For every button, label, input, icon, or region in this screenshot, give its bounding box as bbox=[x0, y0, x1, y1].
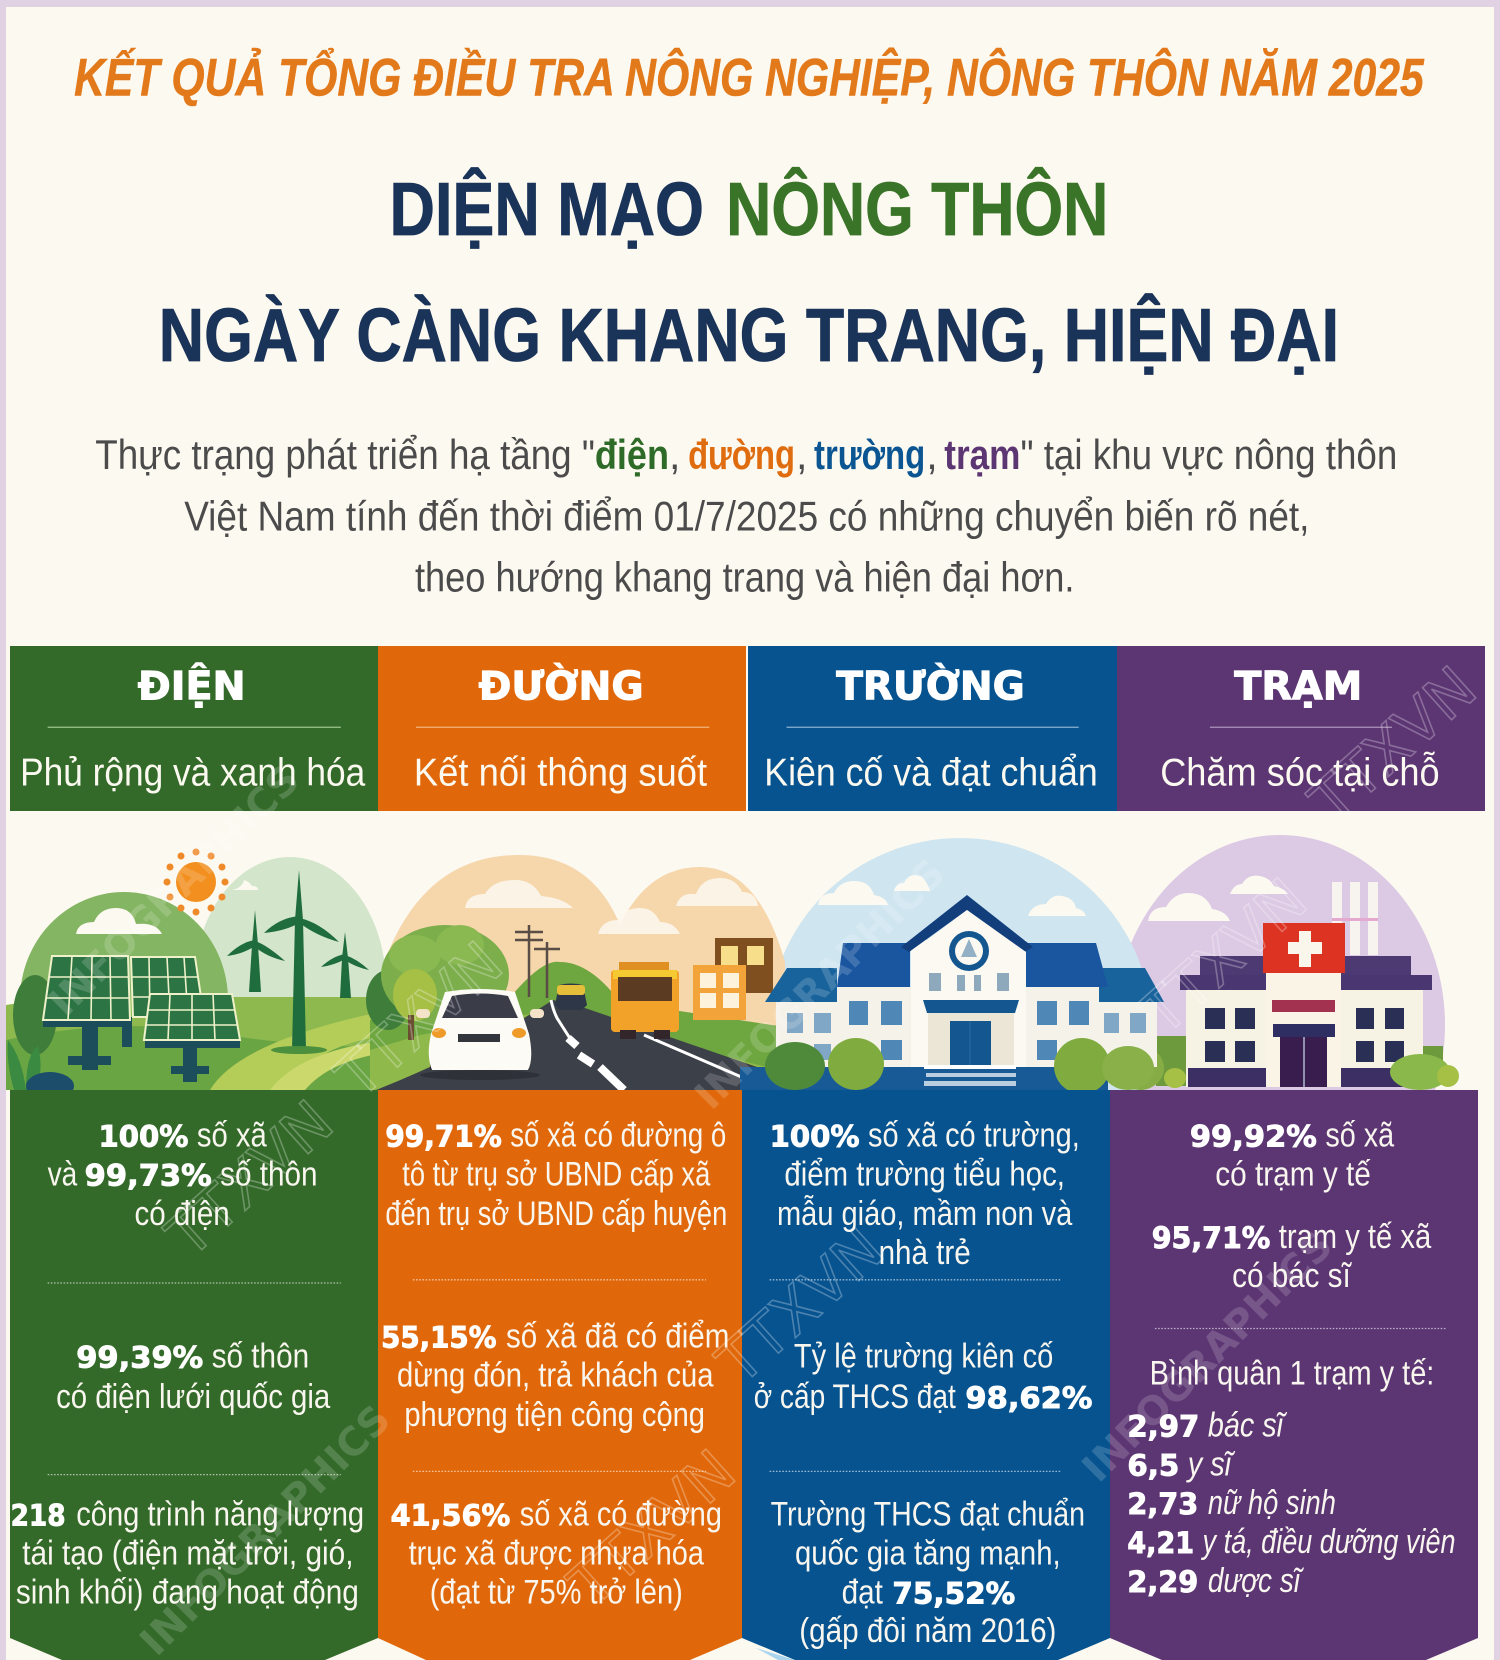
text block: trạm statistics: có trạm y tế bbox=[1215, 1156, 1371, 1194]
text block: điện statistics: và bbox=[48, 1156, 77, 1194]
icon: sun bbox=[164, 848, 228, 916]
watermark: agency marks: INFOGRAPHICS bbox=[132, 1397, 400, 1660]
icon: wind turbines bbox=[227, 870, 369, 1054]
text block: điện statistics: số thôn bbox=[212, 1338, 309, 1376]
text block: điện statistics: có điện lưới quốc gia bbox=[56, 1378, 330, 1416]
text block: introduction: theo hướng khang trang và hiện đại hơn. bbox=[415, 555, 1074, 601]
text block: trường statistics: số xã có trường, bbox=[868, 1116, 1080, 1154]
text block: introduction: Việt Nam tính đến thời điểm 01/7/2025 có những chuyển biến rõ nét, bbox=[184, 493, 1309, 539]
text block: trường statistics: điểm trường tiểu học, bbox=[784, 1156, 1065, 1194]
heading: trường: TRƯỜNG bbox=[836, 663, 1025, 710]
text block: trường statistics: 100% bbox=[770, 1118, 860, 1153]
icon: cloud bbox=[76, 908, 162, 934]
illustration: health station scene bbox=[1116, 876, 1459, 1090]
text block: điện statistics: số xã bbox=[197, 1116, 267, 1154]
heading: trạm: TRẠM bbox=[1234, 665, 1362, 710]
text block: điện statistics: số thôn bbox=[220, 1156, 318, 1194]
watermark: agency marks: TTXVN bbox=[153, 1087, 346, 1271]
text block: trạm statistics: 95,71% bbox=[1152, 1220, 1270, 1255]
icon: chimneys bbox=[1332, 882, 1378, 955]
heading: điện: ĐIỆN bbox=[138, 663, 246, 710]
title: main heading bbox=[159, 166, 1339, 377]
heading: trường bbox=[764, 663, 1098, 794]
text block: trường statistics bbox=[754, 1116, 1092, 1650]
illustration: rural road scene bbox=[366, 855, 785, 1090]
text block: introduction bbox=[95, 432, 1397, 601]
icon: houses bbox=[693, 938, 773, 1020]
text block: đường statistics: đến trụ sở UBND cấp huyện bbox=[385, 1195, 727, 1233]
text block: trạm statistics: số xã bbox=[1325, 1116, 1394, 1154]
text block: điện statistics: có điện bbox=[134, 1195, 230, 1233]
icon: health station building bbox=[1180, 923, 1432, 1087]
text block: introduction: , bbox=[796, 432, 808, 478]
text block: trạm statistics: bác sĩ bbox=[1208, 1406, 1288, 1444]
text block: đường statistics: số xã có đường ô bbox=[510, 1116, 726, 1154]
text block: điện statistics: 100% bbox=[98, 1118, 188, 1153]
text block: introduction: Thực trạng phát triển hạ tầng " bbox=[95, 432, 595, 478]
illustration: solar and wind energy scene bbox=[6, 848, 391, 1113]
icon: white car bbox=[416, 989, 544, 1080]
heading: trạm bbox=[1160, 665, 1440, 794]
text block: trường statistics: 98,62% bbox=[965, 1380, 1092, 1415]
icon: school bushes bbox=[765, 1038, 1154, 1094]
title: main heading: NÔNG THÔN bbox=[726, 167, 1108, 251]
icon: utility poles bbox=[515, 925, 560, 998]
panel: điện header bbox=[10, 646, 378, 811]
text block: đường statistics: số xã đã có điểm bbox=[506, 1318, 729, 1356]
text block: đường statistics: (đạt từ 75% trở lên) bbox=[430, 1574, 683, 1612]
text block: introduction: , bbox=[926, 432, 938, 478]
text block: đường statistics: 41,56% bbox=[391, 1497, 510, 1532]
heading: điện: Phủ rộng và xanh hóa bbox=[20, 751, 365, 794]
text block: đường statistics: dừng đón, trả khách của bbox=[397, 1357, 714, 1395]
icon: school building bbox=[765, 895, 1164, 1086]
text block: trạm statistics: nữ hộ sinh bbox=[1208, 1484, 1336, 1522]
text block: trạm statistics: có bác sĩ bbox=[1232, 1257, 1352, 1295]
text block: introduction: " tại khu vực nông thôn bbox=[1020, 432, 1397, 478]
text block: điện statistics: 99,73% bbox=[85, 1158, 212, 1193]
text block: trạm statistics: Bình quân 1 trạm y tế: bbox=[1150, 1355, 1434, 1393]
text block: đường statistics: 55,15% bbox=[381, 1320, 496, 1355]
text block: trạm statistics: 4,21 bbox=[1127, 1525, 1194, 1560]
watermark: agency marks: TTXVN bbox=[1127, 865, 1320, 1048]
heading: điện bbox=[20, 663, 365, 794]
text block: trường statistics: quốc gia tăng mạnh, bbox=[795, 1535, 1061, 1573]
text block: trạm statistics: y sĩ bbox=[1186, 1446, 1236, 1484]
text block: đường statistics: số xã có đường bbox=[520, 1495, 722, 1533]
text block: trạm statistics: trạm y tế xã bbox=[1279, 1218, 1431, 1256]
text block: introduction: trạm bbox=[944, 432, 1020, 478]
road bbox=[376, 1000, 760, 1090]
text block: trạm statistics: 2,73 bbox=[1127, 1486, 1198, 1521]
watermark: agency marks: TTXVN bbox=[322, 928, 516, 1112]
text block: introduction: điện bbox=[595, 432, 669, 478]
text block: trạm statistics: dược sĩ bbox=[1208, 1562, 1304, 1600]
text block: điện statistics: tái tạo (điện mặt trời, gió, bbox=[22, 1535, 354, 1573]
heading: trường: Kiên cố và đạt chuẩn bbox=[764, 751, 1098, 794]
text block: trường statistics: (gấp đôi năm 2016) bbox=[799, 1612, 1056, 1650]
text block: đường statistics: trục xã được nhựa hóa bbox=[409, 1535, 704, 1573]
text block: trạm statistics: 2,97 bbox=[1127, 1408, 1199, 1443]
heading: đường: ĐƯỜNG bbox=[478, 663, 644, 710]
watermark: agency marks: INFOGRAPHICS bbox=[41, 758, 309, 1025]
text block: đường statistics bbox=[381, 1116, 729, 1612]
panel: điện statistics background bbox=[10, 1090, 378, 1660]
icon: solar panels bbox=[43, 956, 240, 1082]
text block: trạm statistics: 99,92% bbox=[1190, 1118, 1317, 1153]
text block: đường statistics: tô từ trụ sở UBND cấp xã bbox=[402, 1156, 710, 1194]
heading: đường bbox=[414, 663, 709, 794]
watermark: agency marks: TTXVN bbox=[1296, 653, 1489, 837]
text block: trạm statistics bbox=[1127, 1116, 1456, 1600]
icon: health station bushes bbox=[1116, 1036, 1459, 1090]
watermark: agency marks: TTXVN bbox=[555, 1436, 748, 1620]
text block: đường statistics: phương tiện công cộng bbox=[404, 1396, 705, 1434]
text block: điện statistics: 99,39% bbox=[76, 1340, 203, 1375]
text block: trường statistics: nhà trẻ bbox=[879, 1234, 971, 1272]
text block: đường statistics: 99,71% bbox=[385, 1118, 502, 1153]
text block: trạm statistics: 2,29 bbox=[1127, 1564, 1198, 1599]
heading: trạm: Chăm sóc tại chỗ bbox=[1160, 751, 1440, 794]
panel: đường header bbox=[378, 646, 746, 811]
icon: small yellow car bbox=[555, 984, 587, 1010]
text block: introduction: trường bbox=[814, 432, 925, 478]
text block: trường statistics: mẫu giáo, mầm non và bbox=[777, 1195, 1072, 1233]
heading: đường: Kết nối thông suốt bbox=[414, 751, 707, 794]
panel: trạm header bbox=[1117, 646, 1485, 811]
icon: trees bbox=[366, 925, 509, 1040]
text block: điện statistics: sinh khối) đang hoạt động bbox=[16, 1574, 359, 1612]
text block: introduction: , bbox=[669, 432, 680, 478]
panel: đường statistics background bbox=[378, 1090, 742, 1660]
panel: trường statistics background bbox=[742, 1090, 1110, 1660]
panel: trạm statistics background bbox=[1110, 1090, 1478, 1660]
icon: bus bbox=[611, 962, 679, 1039]
watermark: agency marks: INFOGRAPHICS bbox=[1074, 1223, 1342, 1491]
illustration: school scene bbox=[740, 875, 1164, 1094]
panel: trường header bbox=[748, 646, 1117, 811]
text block: trường statistics: 75,52% bbox=[892, 1576, 1015, 1611]
text block: trường statistics: ở cấp THCS đạt bbox=[754, 1378, 956, 1416]
title: main heading: DIỆN MẠO bbox=[390, 166, 704, 251]
text block: introduction: đường bbox=[688, 432, 795, 478]
text block: điện statistics bbox=[11, 1116, 364, 1612]
watermark: agency marks: TTXVN bbox=[703, 1214, 897, 1398]
text block: trạm statistics: 6,5 bbox=[1127, 1448, 1179, 1483]
text block: trường statistics: Trường THCS đạt chuẩn bbox=[771, 1495, 1085, 1533]
watermark: agency marks bbox=[41, 653, 1489, 1660]
watermark: agency marks: INFOGRAPHICS bbox=[687, 851, 954, 1119]
text block: trường statistics: đạt bbox=[842, 1574, 883, 1612]
text block: điện statistics: 218 bbox=[11, 1497, 66, 1532]
text block: điện statistics: công trình năng lượng bbox=[76, 1495, 364, 1533]
illustration: sky domes behind the scenes bbox=[768, 835, 1445, 1222]
text block: trường statistics: Tỷ lệ trường kiên cố bbox=[794, 1338, 1053, 1376]
